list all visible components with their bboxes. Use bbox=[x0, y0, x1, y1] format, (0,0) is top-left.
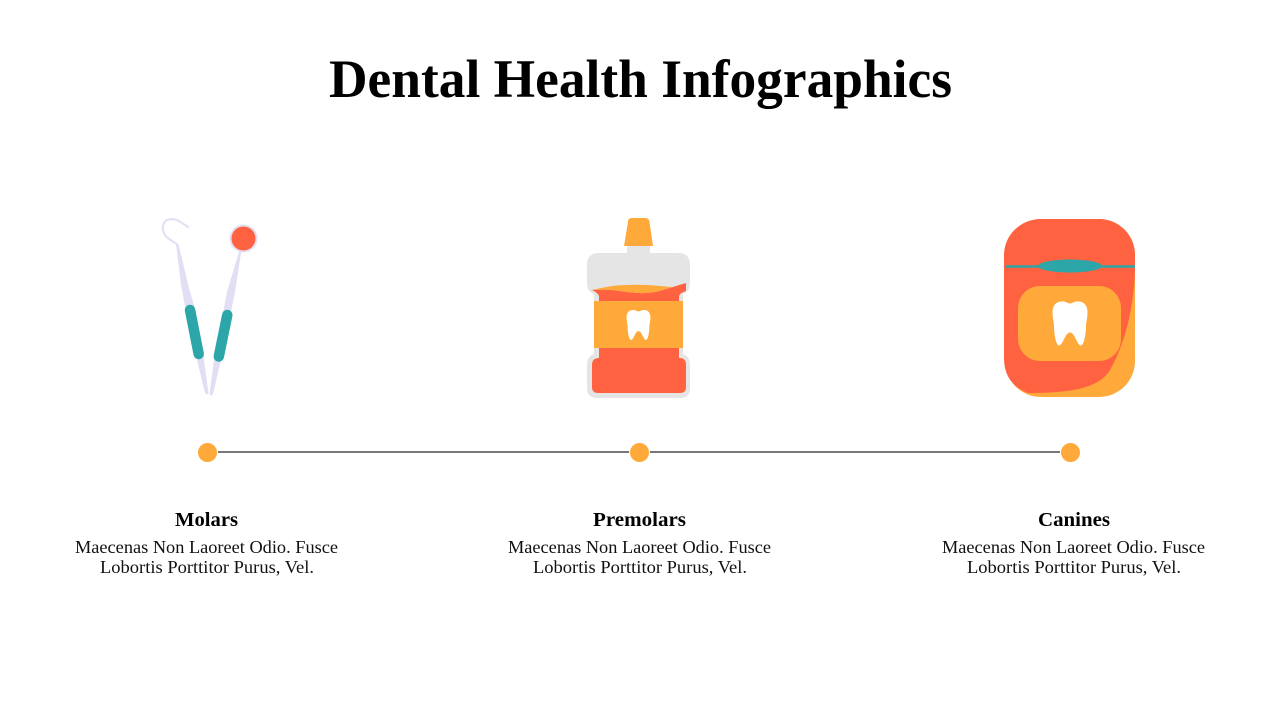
text block: molars bbox=[75, 509, 338, 577]
floss strand bbox=[1005, 265, 1135, 268]
timeline dot: canines bbox=[1060, 442, 1080, 462]
description: premolars line 2: Lobortis Porttitor Purus, Vel. bbox=[533, 557, 747, 577]
text block: canines bbox=[942, 509, 1205, 577]
timeline bbox=[198, 442, 1080, 462]
bottle body bbox=[587, 253, 690, 398]
dental mirror bbox=[210, 224, 258, 396]
description: canines line 1: Maecenas Non Laoreet Odio. Fusce bbox=[942, 537, 1205, 557]
icon: tooth bbox=[627, 310, 650, 340]
box front bbox=[1004, 219, 1135, 393]
heading: canines: Canines bbox=[1038, 509, 1110, 531]
dental probe bbox=[163, 219, 208, 394]
bottle neck bbox=[627, 246, 650, 254]
icon: dental floss box bbox=[1004, 219, 1135, 397]
timeline dot: premolars bbox=[630, 442, 650, 462]
box label bbox=[1018, 286, 1121, 361]
liquid highlight bbox=[592, 285, 672, 293]
liquid bbox=[592, 283, 686, 393]
timeline dot: molars bbox=[198, 442, 218, 462]
text block: premolars bbox=[508, 509, 771, 577]
description: canines line 2: Lobortis Porttitor Purus, Vel. bbox=[967, 557, 1181, 577]
heading: premolars: Premolars bbox=[593, 509, 686, 531]
timeline line bbox=[218, 451, 1060, 453]
bottle label bbox=[594, 301, 683, 348]
description: molars line 1: Maecenas Non Laoreet Odio. Fusce bbox=[75, 537, 338, 557]
title: Dental Health Infographics bbox=[329, 49, 952, 109]
icon: tooth bbox=[1052, 301, 1088, 346]
box shadow side bbox=[1005, 219, 1135, 397]
floss opening bbox=[1038, 260, 1102, 272]
bottle cap bbox=[624, 218, 653, 246]
icon: dental tools bbox=[163, 219, 258, 396]
heading: molars: Molars bbox=[175, 509, 238, 531]
description: molars line 2: Lobortis Porttitor Purus, Vel. bbox=[100, 557, 314, 577]
icon: mouthwash bottle bbox=[587, 218, 690, 398]
description: premolars line 1: Maecenas Non Laoreet Odio. Fusce bbox=[508, 537, 771, 557]
